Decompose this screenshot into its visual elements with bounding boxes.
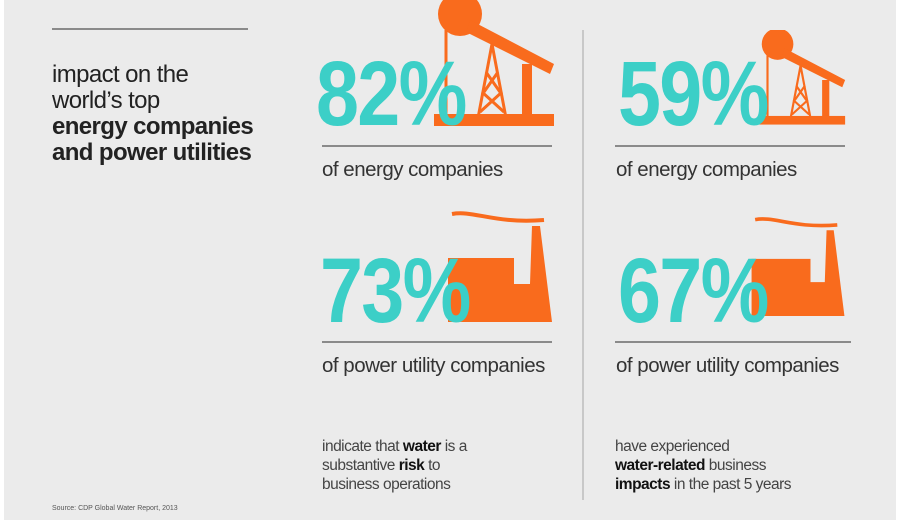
note left: substantive risk to [322,457,440,474]
icon: factory 2 [752,217,844,316]
note left: business operations [322,476,450,493]
note left: indicate that water is a [322,438,467,455]
label: of power utility companies [322,354,545,377]
divider [582,30,584,500]
label: of energy companies [322,158,503,181]
stat: 73%: 73% [320,240,470,342]
stat: 82%: 82% [316,43,466,145]
stat: 67%: 67% [618,240,768,342]
title: world’s top [52,87,160,114]
title: impact on the [52,61,188,88]
note right [615,438,791,493]
icon: factory 1 [448,211,552,322]
icon: pump jack 1 [434,0,554,126]
label: of power utility companies [616,354,839,377]
title [52,61,253,166]
title: and power utilities [52,139,251,166]
label: of energy companies [616,158,797,181]
note right: have experienced [615,438,729,455]
note left [322,438,468,493]
title: energy companies [52,113,253,140]
source: Source: CDP Global Water Report, 2013 [52,505,178,512]
note right: impacts in the past 5 years [615,476,791,493]
note right: water-related business [615,457,766,474]
icon: pump jack 2 [759,30,846,125]
stat: 59%: 59% [618,43,768,145]
